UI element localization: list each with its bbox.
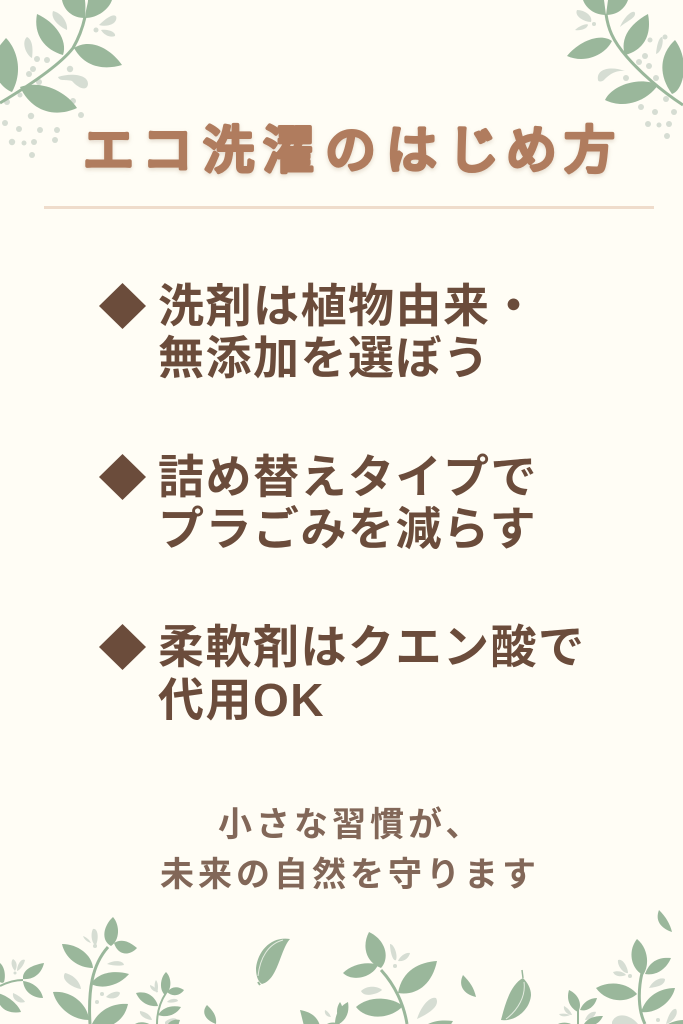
plant 5 <box>558 990 603 1024</box>
item 3 text: 代用OK <box>158 674 325 726</box>
bullet diamond 1 <box>99 283 146 329</box>
item 3 text <box>158 621 586 726</box>
item 2 text: 詰め替えタイプで <box>158 451 538 503</box>
plant 3 <box>337 932 453 1024</box>
closing message: 小さな習慣が、 <box>218 806 483 844</box>
small falling leaf <box>204 1005 216 1024</box>
plant 1 <box>53 917 137 1024</box>
title divider <box>44 206 654 209</box>
large falling leaf <box>501 970 531 1020</box>
plant at far left <box>0 961 44 1012</box>
plant 2 <box>135 972 184 1024</box>
top-right leaf branch <box>567 0 683 139</box>
item 1 text: 無添加を選ぼう <box>158 332 490 384</box>
bullet diamond 2 <box>99 454 146 500</box>
title: エコ洗濯のはじめ方 <box>83 122 615 179</box>
bottom foliage <box>0 910 683 1024</box>
item 1 text: 洗剤は植物由来・ <box>158 280 538 332</box>
plant near centre-left <box>300 1002 348 1024</box>
small falling leaf <box>461 975 476 997</box>
closing message <box>160 806 540 894</box>
small falling leaf <box>658 910 672 932</box>
item 3 text: 柔軟剤はクエン酸で <box>158 621 586 673</box>
top-left leaf branch <box>0 0 122 158</box>
bullet diamond 3 <box>99 624 146 670</box>
closing message: 未来の自然を守ります <box>160 856 540 894</box>
item 1 text <box>158 280 538 384</box>
item 2 text <box>158 451 538 555</box>
plant 6 <box>596 939 683 1024</box>
large falling leaf <box>256 939 290 985</box>
item 2 text: プラごみを減らす <box>158 503 537 555</box>
